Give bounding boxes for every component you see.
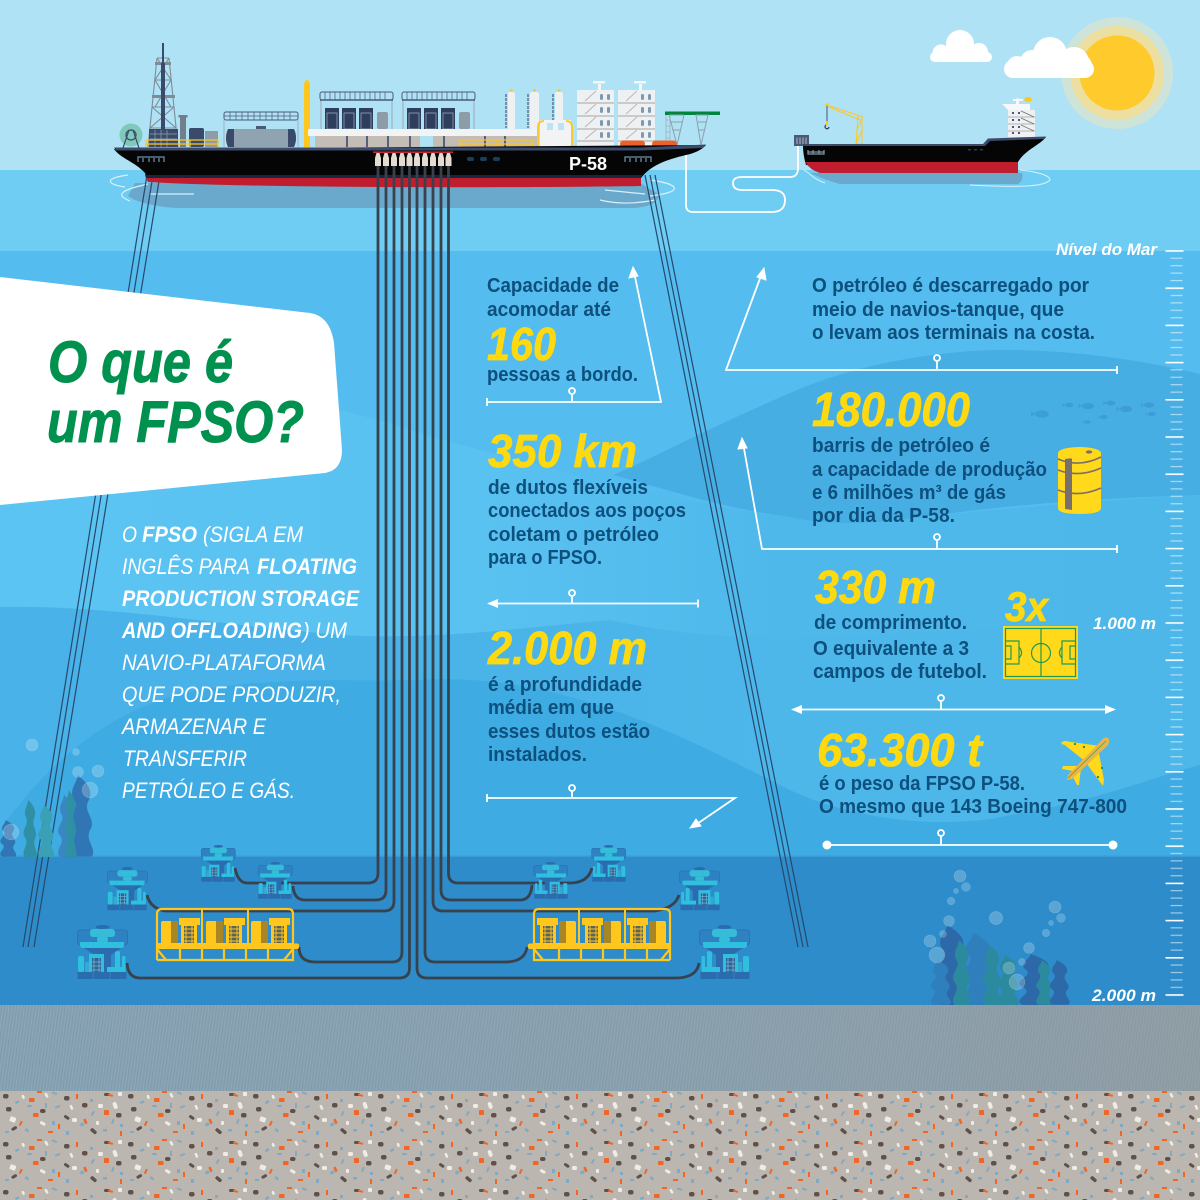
title: um FPSO? bbox=[47, 390, 304, 455]
callout: offloading: O petróleo é descarregado por bbox=[812, 274, 1089, 297]
tanker ship bbox=[794, 97, 1050, 186]
lifeboats bbox=[620, 140, 677, 148]
callout: 160 people: pessoas a bordo. bbox=[487, 363, 638, 386]
FPSO shadow and water ripples bbox=[110, 175, 674, 208]
sea surface band bbox=[0, 170, 1200, 252]
scale label: 1000 m: 1.000 m bbox=[1093, 614, 1156, 633]
subsea manifold left bbox=[157, 909, 299, 960]
callout: 180.000 barrels: por dia da P-58. bbox=[812, 504, 955, 527]
intro paragraph: QUE PODE PRODUZIR, bbox=[122, 682, 341, 707]
callout: 350 km: de dutos flexíveis bbox=[488, 476, 648, 499]
arrow line: 180.000 bbox=[738, 438, 1117, 553]
callout: 2.000 m: é a profundidade bbox=[488, 673, 642, 696]
waterline stripe bbox=[145, 175, 642, 178]
callout: 63.300 t: é o peso da FPSO P-58. bbox=[819, 772, 1025, 795]
intro paragraph: INGLÊS PARA bbox=[122, 554, 250, 579]
callout: 2.000 m: esses dutos estão bbox=[488, 720, 650, 743]
riser connectors bbox=[373, 152, 453, 166]
callout: offloading: o levam aos terminais na costa. bbox=[812, 321, 1095, 344]
FPSO ship P-58 bbox=[114, 43, 720, 187]
white deck and tan modules bbox=[308, 129, 537, 147]
deck line bbox=[114, 144, 706, 150]
intro paragraph: PETRÓLEO E GÁS. bbox=[122, 778, 295, 803]
seaweed left bbox=[0, 739, 104, 858]
intro paragraph: ) UM bbox=[300, 618, 347, 643]
intro paragraph: NAVIO-PLATAFORMA bbox=[122, 650, 326, 675]
mooring lines right bbox=[645, 175, 808, 947]
intro paragraph: TRANSFERIR bbox=[123, 746, 247, 771]
flexible risers bbox=[127, 160, 699, 978]
callout: 350 km: conectados aos poços bbox=[488, 499, 686, 522]
fish school bbox=[1031, 400, 1156, 424]
red hull band bbox=[146, 178, 641, 187]
callout: 330 m bbox=[813, 561, 1050, 683]
callout: 180.000 barrels: 180.000 bbox=[812, 384, 970, 437]
callout: 160 people: acomodar até bbox=[487, 298, 611, 321]
horizontal tank module bbox=[224, 112, 298, 147]
arrow line: 350 km bbox=[487, 590, 698, 608]
dot line: 63.300 t bbox=[822, 830, 1118, 850]
callout: 330 m: de comprimento. bbox=[814, 611, 967, 634]
callout: 330 m: 330 m bbox=[815, 561, 936, 613]
reel bbox=[120, 124, 142, 148]
christmas trees left bbox=[78, 845, 292, 979]
yellow railing stern bbox=[146, 140, 218, 148]
callout: 350 km: 350 km bbox=[488, 425, 637, 477]
ship name: P-58 bbox=[569, 154, 607, 174]
offloading hose bbox=[686, 146, 798, 212]
callout: 330 m: O equivalente a 3 bbox=[813, 637, 969, 660]
callout: 63.300 t: 63.300 t bbox=[817, 724, 984, 776]
intro paragraph: PRODUCTION STORAGE bbox=[122, 586, 360, 611]
hawse grates bbox=[138, 157, 651, 162]
intro paragraph: FLOATING bbox=[257, 554, 357, 579]
gravel layer bbox=[0, 1091, 1200, 1200]
double arrow: 330 m bbox=[791, 695, 1116, 714]
callout: 2.000 m: média em que bbox=[488, 696, 614, 719]
yellow arch module bbox=[538, 120, 572, 147]
scale label: 2000 m: 2.000 m bbox=[1091, 986, 1156, 1005]
callout: 63.300 t: O mesmo que 143 Boeing 747-800 bbox=[819, 795, 1127, 818]
callout: 160 people bbox=[487, 274, 638, 386]
sky bbox=[0, 0, 1200, 171]
callout: 180.000 barrels bbox=[812, 384, 1047, 527]
arrow line: 160 people to ship bbox=[487, 267, 661, 406]
title bbox=[47, 330, 304, 455]
sun bbox=[1061, 17, 1173, 129]
callout: offloading: meio de navios-tanque, que bbox=[812, 298, 1064, 321]
intro paragraph: O bbox=[122, 522, 137, 547]
icon: oil barrel bbox=[1058, 447, 1101, 514]
callout: 350 km: coletam o petróleo bbox=[488, 523, 659, 546]
hull bbox=[114, 145, 706, 180]
arrow line: offloading bbox=[726, 268, 1117, 374]
process units stern bbox=[149, 115, 218, 147]
tanker manifold box bbox=[794, 135, 809, 146]
tanker superstructure bbox=[1002, 97, 1035, 137]
callout: 160 people: 160 bbox=[487, 318, 556, 370]
christmas trees right bbox=[534, 845, 750, 979]
callout: 63.300 t bbox=[817, 724, 1127, 818]
callout: 2.000 m bbox=[487, 622, 650, 766]
intro paragraph: ARMAZENAR E bbox=[120, 714, 267, 739]
cloud small bbox=[930, 30, 992, 62]
cloud large bbox=[1004, 37, 1094, 78]
scale label: sea level: Nível do Mar bbox=[1056, 240, 1158, 259]
mooring lines left bbox=[23, 175, 160, 947]
intro paragraph: (SIGLA EM bbox=[203, 522, 303, 547]
callout: 160 people: Capacidade de bbox=[487, 274, 619, 297]
intro paragraph: FPSO bbox=[142, 522, 197, 547]
icon: airplane bbox=[1061, 737, 1109, 786]
callout: 180.000 barrels: barris de petróleo é bbox=[812, 434, 990, 457]
derrick bbox=[148, 43, 178, 147]
seaweed right bbox=[924, 870, 1070, 1006]
callout: 330 m: 3x bbox=[1005, 583, 1050, 630]
title: O que é bbox=[48, 330, 233, 395]
title panel bbox=[0, 277, 342, 505]
depth scale bbox=[1056, 240, 1185, 1005]
yellow railing center bbox=[460, 140, 533, 148]
tanker crane bbox=[825, 103, 862, 144]
arrow line: 2.000 m bbox=[487, 785, 735, 828]
intro paragraph: AND OFFLOADING bbox=[121, 618, 302, 643]
accommodation towers bbox=[577, 81, 614, 147]
callout: 2.000 m: 2.000 m bbox=[487, 622, 647, 674]
callout: 180.000 barrels: e 6 milhões m³ de gás bbox=[812, 481, 1006, 504]
tanker hull bbox=[803, 137, 1046, 165]
white columns bbox=[506, 89, 563, 130]
intro paragraph bbox=[120, 522, 360, 803]
callout: 350 km: para o FPSO. bbox=[488, 546, 602, 569]
callout: 330 m: campos de futebol. bbox=[813, 660, 987, 683]
sea water layers bbox=[0, 251, 1200, 1006]
subsea manifold right bbox=[528, 909, 670, 960]
hull windows bbox=[467, 157, 500, 161]
icon: football field bbox=[1003, 626, 1078, 679]
seabed sediment bbox=[0, 1005, 1200, 1091]
callout: 2.000 m: instalados. bbox=[488, 743, 587, 766]
bow crane bbox=[665, 112, 720, 146]
flare stack bbox=[304, 80, 310, 147]
callout: 350 km bbox=[488, 425, 686, 569]
callout: offloading bbox=[812, 274, 1095, 344]
production modules bbox=[320, 92, 393, 129]
callout: 180.000 barrels: a capacidade de produção bbox=[812, 458, 1047, 481]
